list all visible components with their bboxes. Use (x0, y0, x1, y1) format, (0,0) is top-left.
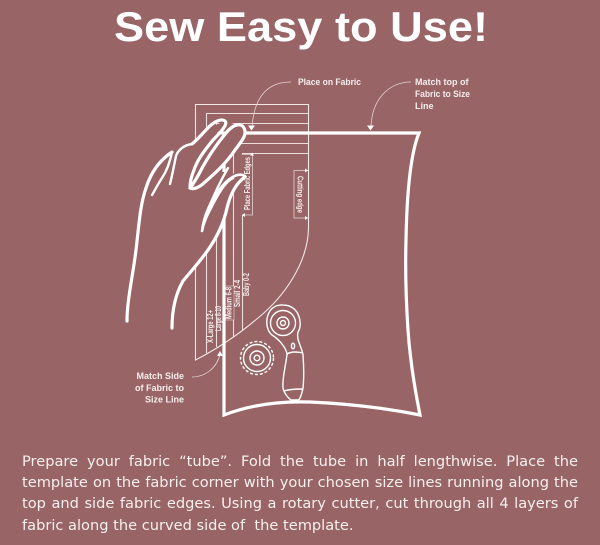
callout: match side of fabric: Size Line (145, 394, 184, 404)
instructions text: Prepare your fabric “tube”. Fold the tube in half lengthwise. Place the (22, 453, 578, 470)
callout: match top of fabric: Match top of (415, 77, 469, 87)
label: place fabric edges (242, 152, 254, 217)
size labels (206, 273, 251, 343)
hand (127, 120, 245, 328)
instructions text (22, 453, 578, 534)
instructions text: fabric along the curved side of the template. (22, 517, 354, 534)
label: place fabric edges: Place Fabric Edges (243, 157, 252, 210)
label: cutting edge (294, 168, 308, 220)
callout: match side of fabric: of Fabric to (135, 383, 185, 393)
callout: match top of fabric: Line (415, 101, 434, 111)
callout: match top of fabric (367, 77, 470, 130)
fabric outline (224, 133, 420, 415)
title: Sew Easy to Use! (114, 3, 488, 50)
callout: match side of fabric (135, 351, 223, 404)
callout: match top of fabric: Fabric to Size (415, 89, 470, 99)
size labels: Small 2-4 (233, 280, 242, 307)
callout: place on fabric: Place on Fabric (298, 77, 361, 87)
size labels: X-Large 12+ (206, 310, 215, 343)
callout: match side of fabric: Match Side (136, 371, 184, 381)
size labels: Baby 0-2 (242, 273, 251, 296)
instructions text: top and side fabric edges. Using a rotary cutter, cut through all 4 layers of (22, 495, 578, 512)
icon: rotary cutter (267, 305, 304, 400)
icon: loose blade (240, 342, 274, 374)
template (196, 104, 308, 360)
size labels: Large 8-10 (214, 306, 223, 331)
label: cutting edge: Cutting edge (296, 176, 304, 213)
callout: place on fabric (248, 77, 361, 130)
size labels: Medium 6-8 (224, 287, 234, 319)
instructions text: template on the fabric corner with your chosen size lines running along the (22, 474, 578, 491)
